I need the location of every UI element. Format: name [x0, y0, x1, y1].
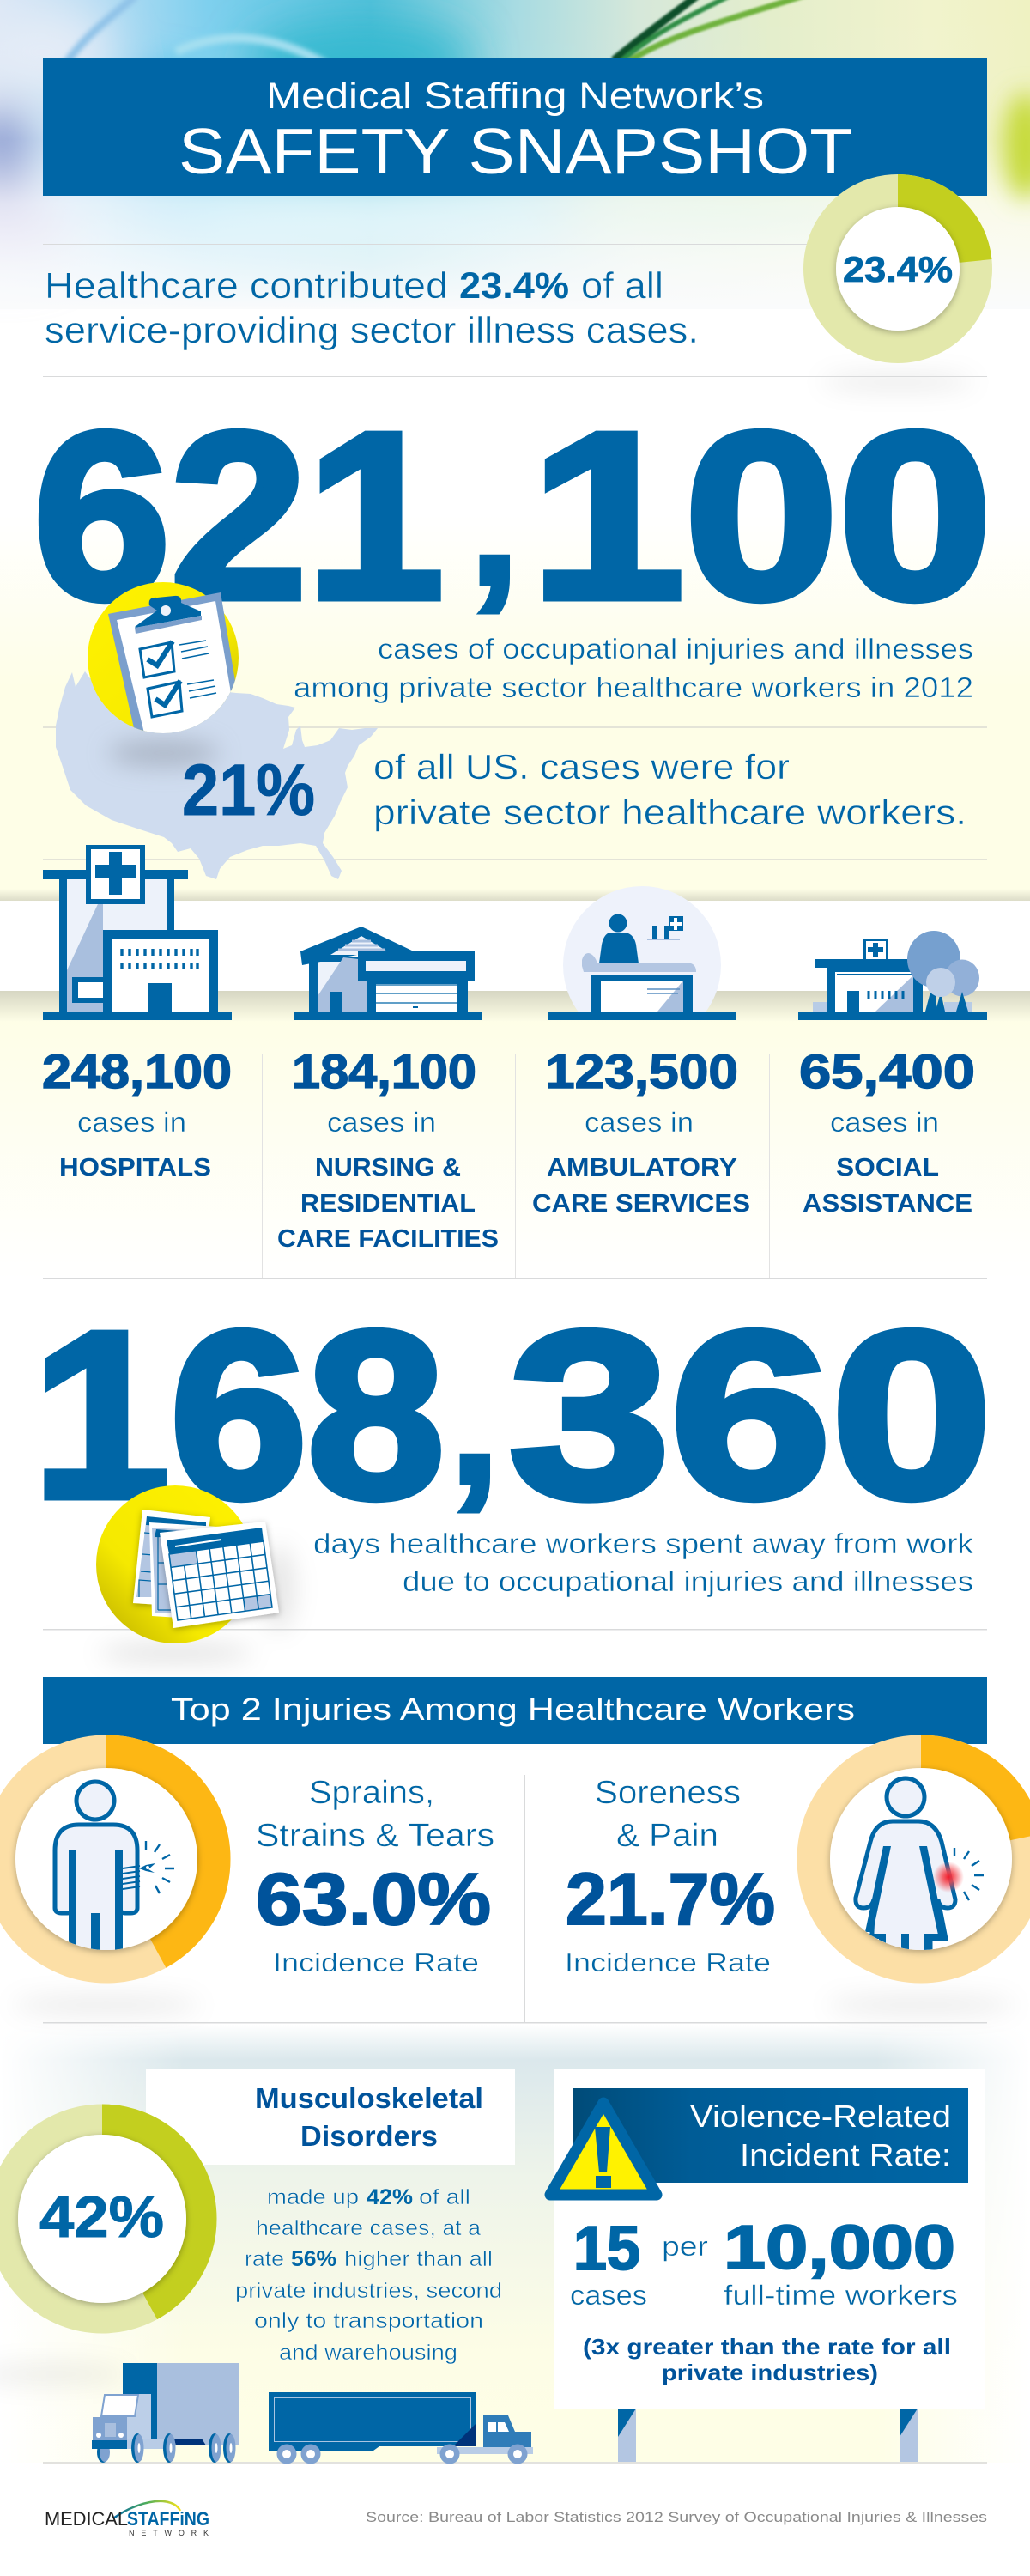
column: ambulatory care: 123,500: [545, 1044, 738, 1098]
icon: clipboard: [88, 582, 239, 733]
icon: nursing home: [294, 927, 482, 1020]
donut: soreness figure: [814, 1752, 1028, 1966]
column: ambulatory care: cases in: [585, 1107, 694, 1138]
billboard legs: [618, 2409, 918, 2464]
text: healthcare contributed: of all: [581, 265, 663, 307]
column: ambulatory care: CARE SERVICES: [532, 1190, 750, 1218]
column: ambulatory care: [532, 1044, 750, 1218]
text: healthcare contributed: 23.4%: [459, 265, 569, 307]
text: cases of occupational injuries: cases of occupational injuries and illnesses: [378, 633, 973, 665]
title line 1: Medical Staffing Network’s: [266, 76, 764, 117]
column: hospitals: [42, 1044, 232, 1182]
stat: soreness and pain: [565, 1775, 775, 1978]
stat: 15 per 10,000: 10,000: [724, 2214, 955, 2282]
icon: semi truck: [269, 2392, 533, 2464]
big number 621,100: 100: [530, 384, 992, 648]
text: days away from work: days healthcare workers spent away from work: [313, 1528, 974, 1559]
text: days away from work: due to occupational injuries and illnesses: [403, 1565, 973, 1597]
footer rule: [43, 2462, 987, 2464]
stat: sprains, strains and tears: Strains & Tears: [256, 1818, 494, 1854]
big number 168,360: 360: [509, 1283, 992, 1547]
stat: 21%: 21%: [182, 750, 315, 830]
column: social assistance: ASSISTANCE: [803, 1190, 972, 1218]
icon: man with arm injury: [55, 1782, 174, 1966]
big number 621,100: 621: [33, 384, 444, 648]
text: musculoskeletal paragraph: rate: [245, 2247, 284, 2271]
donut: 42%: 42%: [39, 2184, 164, 2250]
column: nursing and residential: [277, 1044, 499, 1253]
big number 168,360: ,: [450, 1320, 500, 1522]
big number 168,360: 168: [33, 1283, 445, 1547]
icon: social assistance: [798, 931, 987, 1020]
text: musculoskeletal paragraph: 56%: [291, 2247, 336, 2271]
US map: [56, 671, 378, 879]
stat: 15 per 10,000: per: [662, 2231, 708, 2262]
column: nursing and residential: 184,100: [292, 1044, 476, 1098]
column: hospitals: cases in: [77, 1107, 186, 1138]
column: nursing and residential: CARE FACILITIES: [277, 1225, 499, 1253]
icon: ambulatory care: [548, 886, 736, 1020]
icon: warning triangle: [550, 2103, 657, 2195]
column: social assistance: cases in: [830, 1107, 939, 1138]
panel: musculoskeletal heading: [146, 2069, 515, 2165]
text: days away from work: [313, 1528, 974, 1597]
stat: soreness and pain: 21.7%: [566, 1859, 775, 1941]
text: of all US cases: private sector healthcare workers.: [373, 793, 966, 832]
stat: soreness and pain: & Pain: [616, 1818, 718, 1854]
stat: 15 per 10,000: full-time workers: [724, 2280, 958, 2311]
title line 2: SAFETY SNAPSHOT: [179, 115, 852, 187]
divider lines: [43, 244, 987, 2023]
source note: Source: Bureau of Labor Statistics 2012 Survey of Occupational Injuries & Illnesses: [366, 2509, 987, 2525]
stat: sprains, strains and tears: [256, 1775, 494, 1978]
text: healthcare contributed: [45, 265, 699, 351]
donut: 23.4%: 23.4%: [843, 249, 953, 289]
panel: violence heading: Violence-Related: [690, 2099, 951, 2134]
stat: soreness and pain: Soreness: [595, 1775, 741, 1811]
big number 168,360: [33, 1283, 992, 1547]
stat: sprains, strains and tears: Incidence Rate: [273, 1947, 479, 1978]
text: 3x greater: private industries): [662, 2360, 878, 2385]
title banner: [43, 58, 987, 196]
column: hospitals: 248,100: [42, 1044, 232, 1098]
text: musculoskeletal paragraph: healthcare cases, at a: [256, 2216, 481, 2240]
text: musculoskeletal paragraph: only to transportation: [254, 2309, 483, 2333]
column: nursing and residential: NURSING &: [315, 1154, 461, 1182]
text: musculoskeletal paragraph: [235, 2185, 502, 2365]
stat: soreness and pain: Incidence Rate: [565, 1947, 771, 1978]
stat: 15 per 10,000: [570, 2214, 958, 2311]
column: social assistance: 65,400: [799, 1044, 975, 1098]
panel: violence box background: [554, 2069, 985, 2409]
text: of all US cases: [373, 747, 966, 832]
text: healthcare contributed: Healthcare contributed: [45, 265, 448, 307]
text: cases of occupational injuries: [294, 633, 973, 703]
text: musculoskeletal paragraph: and warehousing: [279, 2341, 457, 2365]
logo: Medical Staffing Network: [45, 2501, 209, 2537]
panel: violence heading: [573, 2088, 968, 2183]
text: cases of occupational injuries: among private sector healthcare workers in 2012: [294, 671, 973, 703]
text: 3x greater: [583, 2334, 951, 2385]
text: musculoskeletal paragraph: private industries, second: [235, 2279, 502, 2303]
icon: box truck: [92, 2363, 239, 2463]
column: social assistance: SOCIAL: [836, 1154, 939, 1182]
column: social assistance: [799, 1044, 975, 1218]
icon: woman with arm pain: [856, 1778, 984, 1966]
text: of all US cases: of all US. cases were for: [373, 747, 790, 787]
stat: 15 per 10,000: cases: [570, 2280, 647, 2311]
panel: musculoskeletal heading: Disorders: [300, 2120, 438, 2152]
column: ambulatory care: AMBULATORY: [547, 1154, 737, 1182]
text: musculoskeletal paragraph: made up: [267, 2185, 359, 2209]
text: musculoskeletal paragraph: higher than all: [344, 2247, 493, 2271]
panel: musculoskeletal heading: Musculoskeletal: [255, 2082, 483, 2114]
icon: hospital: [43, 845, 232, 1020]
banner: top 2 injuries: [43, 1677, 987, 1744]
stat: sprains, strains and tears: 63.0%: [256, 1859, 491, 1941]
logo: Medical Staffing Network: NETWORK: [129, 2529, 209, 2537]
donut: 42%: [3, 2119, 202, 2318]
icon: calendars: [96, 1485, 279, 1643]
logo: Medical Staffing Network: STAFFiNG: [127, 2508, 209, 2530]
column: nursing and residential: cases in: [327, 1107, 436, 1138]
soft shadows: [0, 374, 1015, 2385]
text: healthcare contributed: service-providing sector illness cases.: [45, 310, 699, 351]
panel: violence heading: Incident Rate:: [740, 2137, 951, 2172]
text: 3x greater: (3x greater than the rate for all: [583, 2334, 951, 2360]
text: musculoskeletal paragraph: 42%: [367, 2185, 413, 2209]
big number 621,100: ,: [470, 421, 519, 623]
text: musculoskeletal paragraph: of all: [419, 2185, 470, 2209]
big number 621,100: [33, 384, 992, 648]
column: nursing and residential: RESIDENTIAL: [300, 1190, 476, 1218]
banner: top 2 injuries: Top 2 Injuries Among Healthcare Workers: [171, 1692, 855, 1727]
stat: sprains, strains and tears: Sprains,: [309, 1775, 434, 1811]
donut: sprains figure: [0, 1752, 214, 1966]
column: hospitals: HOSPITALS: [59, 1154, 211, 1182]
stat: 15 per 10,000: 15: [573, 2215, 640, 2283]
logo: Medical Staffing Network: MEDICAL: [45, 2508, 128, 2530]
donut: 23.4%: [820, 191, 976, 347]
